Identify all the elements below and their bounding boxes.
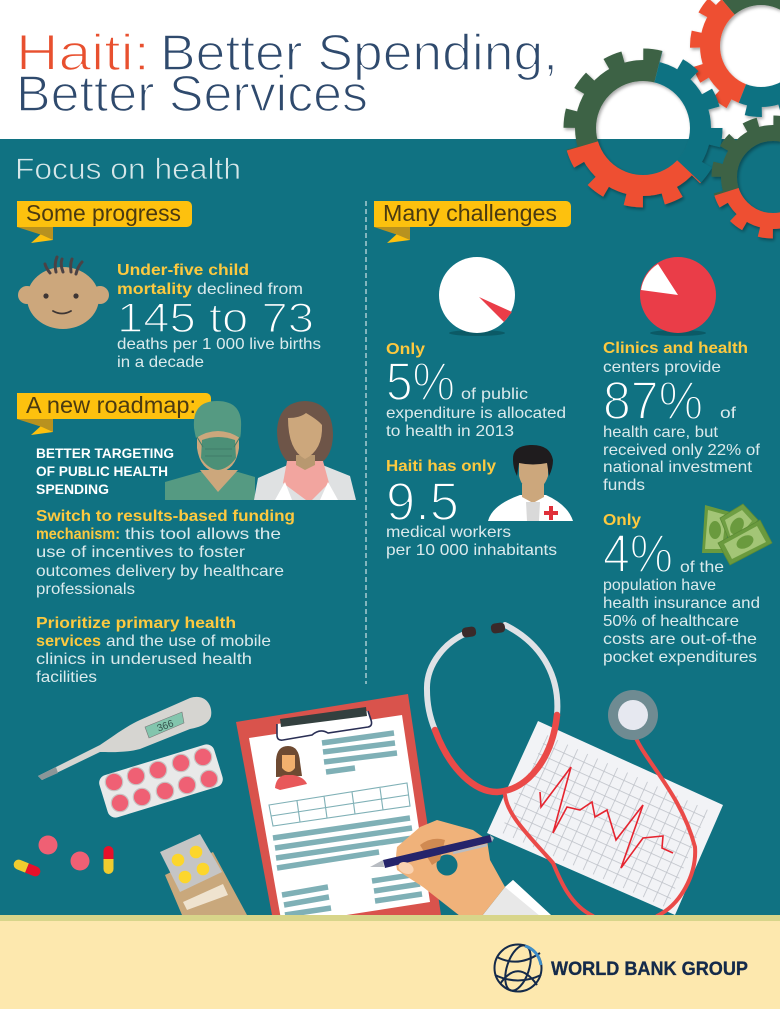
text: 4% health insurance: population have xyxy=(603,577,716,594)
text: under-five child mortality: mortality xyxy=(117,281,192,298)
divider xyxy=(365,201,367,684)
tag: a new roadmap: A new roadmap: xyxy=(26,392,196,418)
text: results-based funding: this tool allows the xyxy=(125,526,281,543)
icon: gear lower right xyxy=(712,116,780,242)
text: prioritize primary health: and the use of mobile xyxy=(106,633,271,650)
text: better targeting: BETTER TARGETING xyxy=(36,446,174,461)
text: 9.5 medical workers: Haiti has only xyxy=(386,458,496,475)
title xyxy=(16,24,558,122)
text: 5% of public expenditure: to health in 2013 xyxy=(386,423,514,440)
text: under-five child mortality: Under-five child xyxy=(117,262,249,279)
text: 5% of public expenditure: of public xyxy=(461,386,528,403)
text: 4% health insurance: pocket expenditures xyxy=(603,649,757,666)
text: under-five child mortality: 145 to 73 xyxy=(117,294,314,341)
text: prioritize primary health xyxy=(36,615,271,686)
text: 9.5 medical workers: per 10 000 inhabitants xyxy=(386,542,557,559)
text: 9.5 medical workers: 9.5 xyxy=(386,472,459,532)
icon: doctor xyxy=(488,445,573,521)
text: 87% clinics and health centers: 87% xyxy=(603,371,703,431)
tag: many challenges xyxy=(374,200,571,243)
chart: 87% pie xyxy=(640,257,716,336)
icon: loose pills xyxy=(12,836,114,878)
icon: thermometer: 366 xyxy=(156,718,176,734)
panel: footer xyxy=(0,915,780,1009)
text: 4% health insurance: Only xyxy=(603,512,641,529)
text: 4% health insurance: of the xyxy=(680,559,724,576)
text: 4% health insurance: health insurance and xyxy=(603,595,760,612)
text: 5% of public expenditure: Only xyxy=(386,341,425,358)
logo text: WORLD BANK GROUP xyxy=(551,959,748,980)
text: 5% of public expenditure: expenditure is allocated xyxy=(386,405,566,422)
text: 87% clinics and health centers: received only 22% of xyxy=(603,442,761,459)
text: 9.5 medical workers xyxy=(386,458,557,559)
icon: gear center xyxy=(563,48,726,211)
text: results-based funding: use of incentives to foster xyxy=(36,544,246,561)
text: results-based funding: mechanism: xyxy=(36,526,120,543)
text: better targeting: SPENDING xyxy=(36,482,109,497)
text: under-five child mortality: declined from xyxy=(197,281,303,298)
icon: money xyxy=(702,504,772,565)
chart: 5% pie xyxy=(439,257,515,336)
text: results-based funding xyxy=(36,508,295,598)
text: 87% clinics and health centers: of xyxy=(720,405,737,422)
text: 87% clinics and health centers xyxy=(603,340,761,494)
title: Better Services xyxy=(16,65,368,122)
icon: thermometer xyxy=(38,697,211,780)
text: 4% health insurance: costs are out-of-the xyxy=(603,631,757,648)
text: under-five child mortality: in a decade xyxy=(117,354,204,371)
text: 4% health insurance xyxy=(603,512,760,666)
text: prioritize primary health: services xyxy=(36,633,101,650)
text: 4% health insurance: 4% xyxy=(603,524,673,584)
text: 87% clinics and health centers: national investment xyxy=(603,459,753,476)
text: prioritize primary health: clinics in underused health xyxy=(36,651,252,668)
icon: yellow pill pack xyxy=(160,834,247,915)
title: Better Spending, xyxy=(160,24,558,81)
text: results-based funding: Switch to results-based funding xyxy=(36,508,295,525)
icon: world bank globe xyxy=(494,942,542,994)
text: 9.5 medical workers: medical workers xyxy=(386,524,511,541)
icon: woman doctor xyxy=(254,401,356,500)
text: 5% of public expenditure: 5% xyxy=(386,352,455,412)
text: under-five child mortality: deaths per 1 000 live births xyxy=(117,336,321,353)
panel: teal background xyxy=(0,139,780,915)
icon: hand with pen xyxy=(370,820,552,916)
tag: some progress xyxy=(17,200,192,243)
text: 87% clinics and health centers: health care, but xyxy=(603,424,719,441)
text: 4% health insurance: 50% of healthcare xyxy=(603,613,739,630)
text: prioritize primary health: Prioritize primary health xyxy=(36,615,236,632)
text: 87% clinics and health centers: Clinics and health xyxy=(603,340,748,357)
tag: many challenges: Many challenges xyxy=(383,200,557,226)
icon: ECG sheet xyxy=(487,721,723,915)
text: prioritize primary health: facilities xyxy=(36,669,97,686)
text: 87% clinics and health centers: funds xyxy=(603,477,645,494)
text: better targeting xyxy=(36,446,174,497)
text: 5% of public expenditure xyxy=(386,341,566,440)
icon: gear top right xyxy=(690,0,780,121)
icon: pill blister xyxy=(97,742,225,820)
heading: focus on health: Focus on health xyxy=(15,153,241,186)
text: better targeting: OF PUBLIC HEALTH xyxy=(36,464,168,479)
icon: stethoscope xyxy=(427,622,695,916)
icon: baby xyxy=(18,257,109,329)
text: under-five child mortality xyxy=(117,262,321,371)
icon: surgeon xyxy=(165,401,255,500)
title: Haiti: xyxy=(16,24,150,81)
icon: clipboard with form xyxy=(236,694,441,925)
tag: a new roadmap xyxy=(17,392,211,435)
text: results-based funding: outcomes delivery by healthcare xyxy=(36,563,284,580)
tag: some progress: Some progress xyxy=(26,200,181,226)
text: results-based funding: professionals xyxy=(36,581,135,598)
text: 87% clinics and health centers: centers provide xyxy=(603,359,721,376)
